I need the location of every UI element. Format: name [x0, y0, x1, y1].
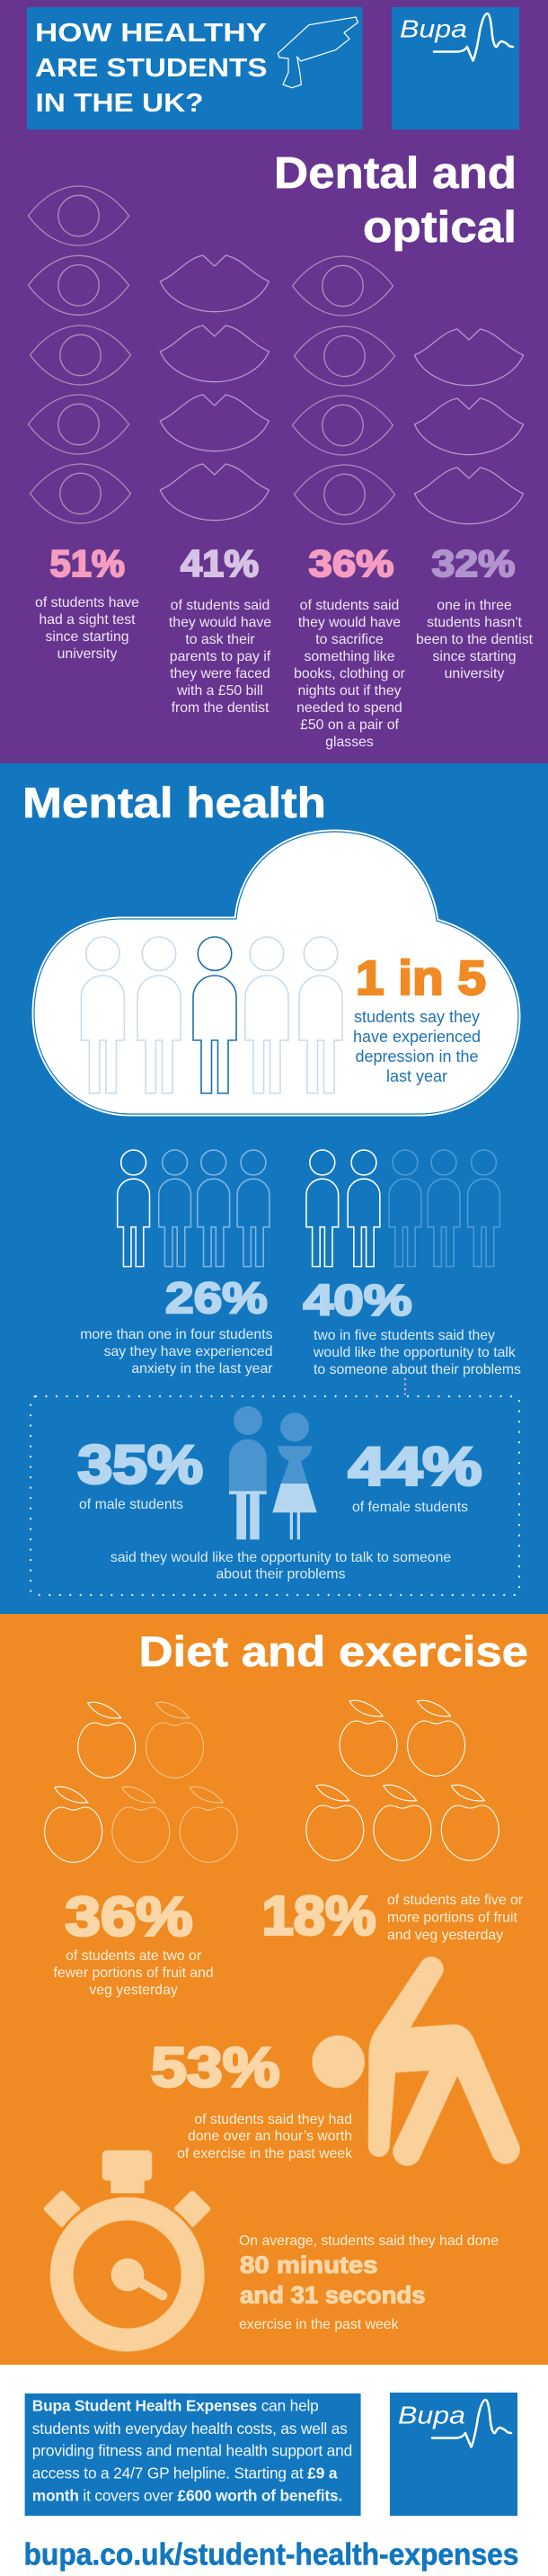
panel: mental health	[0, 763, 548, 1614]
stat: 26%: say they have experienced	[104, 1344, 273, 1359]
text: opportunity: said they would like the opportunity to talk to someone	[110, 1550, 451, 1565]
cloud callout	[34, 832, 518, 1114]
stat: 36% fruit	[53, 1886, 214, 1998]
stat: 40%: 40%	[304, 1277, 412, 1324]
stat: 36%: books, clothing or	[294, 666, 405, 682]
stat: 36% fruit: fewer portions of fruit and	[53, 1965, 214, 1981]
stat: 36%: of students said	[300, 598, 399, 613]
logo: Bupa footer	[390, 2393, 517, 2516]
icon: male figure	[229, 1406, 267, 1539]
stat: 53%: done over an hour’s worth	[188, 2129, 352, 2144]
stat: 51%: of students have	[35, 595, 139, 611]
heading: Mental health: Mental health	[22, 779, 326, 826]
stat: 51%: had a sight test	[39, 612, 136, 628]
icons: apples, two of five highlighted	[45, 1702, 237, 1862]
icon: stopwatch	[43, 2151, 211, 2354]
stat: 51%	[35, 542, 139, 662]
stat: 32%: been to the dentist	[416, 632, 534, 647]
stat: 26%: 26%	[165, 1275, 268, 1323]
stat: 36%: glasses	[325, 735, 374, 750]
stat: 36%: nights out if they	[297, 683, 402, 699]
text: average exercise: exercise in the past week	[239, 2317, 399, 2332]
stat: 41%: parents to pay if	[170, 649, 271, 664]
stat: 40%	[304, 1277, 521, 1377]
icons: apples, five highlighted	[306, 1700, 499, 1860]
title box: IN THE UK?	[36, 89, 204, 118]
icons: eyes column 1	[29, 186, 131, 523]
stat: 53%	[151, 2037, 352, 2162]
stat: 41%: 41%	[181, 542, 259, 584]
text: depression: last year	[386, 1067, 447, 1085]
stat: 41%: from the dentist	[172, 700, 270, 716]
panel: footer	[0, 2365, 548, 2576]
icons: four people, one highlighted	[118, 1150, 270, 1267]
text: opportunity: about their problems	[216, 1566, 346, 1582]
stat: 40%: would like the opportunity to talk	[313, 1345, 516, 1360]
text: depression: depression in the	[355, 1047, 479, 1065]
text: male: of male students	[79, 1497, 183, 1512]
heading: Dental and optical	[274, 149, 517, 252]
icon: female figure	[272, 1413, 317, 1539]
panel: dental and optical	[0, 0, 548, 763]
stat: 51%: since starting	[45, 629, 129, 645]
stat: 36%: needed to spend	[296, 700, 402, 716]
stat: 36%: £50 on a pair of	[300, 718, 399, 733]
stat: 36% fruit: 36%	[65, 1886, 192, 1948]
stat: 53%: 53%	[151, 2037, 280, 2099]
text box: Bupa Student Health Expenses: students with everyday health costs, as well as	[32, 2420, 348, 2438]
stat: 36%: to sacrifice	[315, 632, 384, 647]
stat: 18% fruit: more portions of fruit	[387, 1910, 517, 1926]
stat: 41%	[169, 542, 271, 716]
text: average exercise	[239, 2233, 499, 2332]
stat: 32%	[416, 542, 534, 682]
text: depression: students say they	[354, 1008, 480, 1026]
icons: eyes column 3	[293, 256, 395, 524]
stat: 26%: more than one in four students	[80, 1327, 273, 1342]
stat: 41%: of students said	[171, 598, 270, 613]
text box: Bupa Student Health Expenses	[25, 2393, 361, 2516]
callout: male and female students	[31, 1396, 519, 1595]
text box: Bupa Student Health Expenses: access to a 24/7 GP helpline. Starting at £9 a	[32, 2465, 338, 2482]
text: average exercise: and 31 seconds	[240, 2282, 426, 2309]
stat: 36%: 36%	[309, 542, 393, 584]
heading: Dental and optical: optical	[363, 203, 517, 252]
stat: 26%	[80, 1275, 273, 1377]
heading: Dental and optical: Dental and	[274, 149, 517, 198]
stat: 26%: anxiety in the last year	[131, 1361, 273, 1377]
stat: 32%: students hasn't	[427, 615, 522, 630]
stat: 32%: since starting	[432, 649, 517, 664]
stat: 18% fruit: of students ate five or	[387, 1893, 523, 1908]
heading: Diet and exercise: Diet and exercise	[138, 1627, 528, 1675]
stat: 41%: to ask their	[185, 632, 255, 647]
stat: 36% fruit: of students ate two or	[66, 1948, 201, 1964]
stat: 44%: 44%	[349, 1437, 482, 1496]
title box: ARE STUDENTS	[35, 54, 268, 83]
stat: 53%: of students said they had	[194, 2112, 352, 2127]
text: average exercise: On average, students said they had done	[239, 2233, 499, 2249]
panel: diet and exercise	[0, 1614, 548, 2365]
link: bupa url: bupa.co.uk/student-health-expenses	[23, 2538, 519, 2572]
stat: 36% fruit: veg yesterday	[89, 1983, 178, 1998]
icons: lips column 2	[160, 255, 269, 521]
stat: 36%: they would have	[298, 615, 401, 630]
text: female: of female students	[352, 1500, 468, 1515]
stat: 32%: 32%	[431, 542, 516, 584]
stat: 32%: university	[445, 666, 504, 682]
title box	[27, 7, 363, 129]
text: average exercise: 80 minutes	[240, 2251, 377, 2278]
icons: five people, two highlighted	[306, 1150, 499, 1267]
stat: 41%: they were faced	[170, 666, 270, 682]
title box: HOW HEALTHY	[35, 19, 267, 48]
stat: 40%: two in five students said they	[314, 1328, 495, 1343]
dotted connector	[404, 1379, 406, 1396]
stat: 51%: university	[57, 646, 117, 662]
icons: five people, one highlighted	[81, 937, 342, 1093]
icon: stretching figure	[313, 1957, 520, 2166]
stat: 36%	[294, 542, 405, 750]
text box: Bupa Student Health Expenses: month it covers over £600 worth of benefits.	[32, 2486, 342, 2504]
stat: 40%: to someone about their problems	[314, 1362, 521, 1377]
stat: 51%: 51%	[50, 542, 125, 584]
text box: Bupa Student Health Expenses: Bupa Student Health Expenses can help	[32, 2396, 319, 2414]
stat: 1 in 5: 1 in 5	[356, 951, 486, 1005]
stat: 53%: of exercise in the past week	[177, 2146, 352, 2162]
stat: 18% fruit: 18%	[262, 1885, 376, 1946]
stat: 35%: 35%	[77, 1435, 203, 1494]
logo: Bupa header	[392, 7, 519, 129]
icons: lips column 4	[415, 329, 523, 524]
stat: 41%: they would have	[169, 615, 271, 630]
stat: 36%: something like	[305, 649, 395, 664]
stat: 32%: one in three	[437, 598, 512, 613]
text box: Bupa Student Health Expenses: providing fitness and mental health support and	[32, 2442, 352, 2460]
stat: 41%: with a £50 bill	[176, 683, 263, 699]
stat: 18% fruit: and veg yesterday	[387, 1928, 503, 1943]
text: depression: have experienced	[353, 1028, 481, 1046]
icon: mortarboard	[278, 17, 358, 88]
stat: 18% fruit	[262, 1885, 523, 1946]
